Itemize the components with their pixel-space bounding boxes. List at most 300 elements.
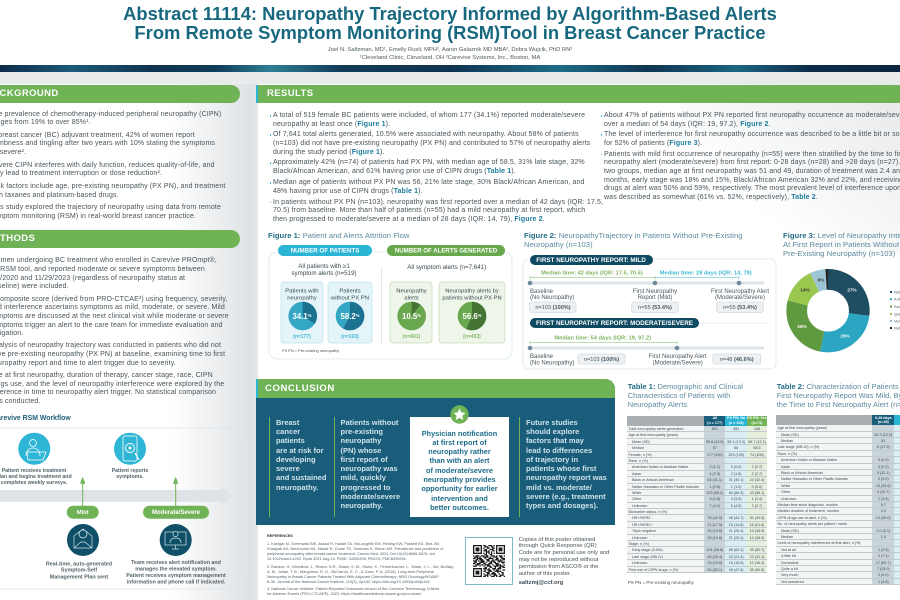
authors and affiliations — [328, 47, 572, 61]
table 2: Asian — [781, 465, 790, 469]
bullet: prevalence — [0, 110, 221, 126]
figure 1: attrition flow — [268, 245, 512, 360]
panel: conclusion — [256, 379, 615, 525]
text: team receives alert: Patient receives symptom management — [126, 573, 226, 579]
table 2: 14 (50.0) — [876, 516, 891, 520]
bullet: px pn — [273, 159, 585, 177]
column text: without pre-existing: pre-existing — [340, 427, 383, 436]
card: neuropathy alerts: Neuropathy — [396, 289, 427, 295]
bullet: moderate first report: over a median of 54 days (IQR: 19, 97.2), Figure 2. — [604, 121, 771, 128]
donut value labels: 1% — [827, 270, 834, 275]
qr notice: permission from ASCO® or the — [519, 564, 598, 570]
table 2: Median — [781, 439, 793, 443]
table 1 title: Neuropathy Alerts — [628, 400, 687, 409]
count boxes: mild: n=55 (53.4%) — [638, 305, 672, 311]
count boxes: moderate/severe: n=103 (100%) — [584, 357, 619, 363]
bullet: adjuvant treatment — [0, 132, 215, 156]
references list: 3. National Cancer Institute. Patient-Reported Outcomes version of the Common Terminology Criteria — [267, 587, 439, 591]
table 2: (n=28) — [878, 420, 889, 424]
text: patient reports symptoms: symptoms. — [116, 474, 144, 480]
timeline arrow — [0, 486, 231, 506]
bullet: px pn: Black/African American, and 61% having prior use of CIPN drugs (Table 1). — [273, 168, 516, 175]
card: alerts by patients without px pn: % — [478, 313, 482, 318]
table 1: 31 (30.1) — [729, 478, 744, 482]
bullet: total patients: A total of 519 female BC patients were included, of whom 177 (34.1%) reported moderate/severe — [273, 112, 585, 119]
background: right top shading — [680, 84, 900, 254]
table 1: Early stage (0-IIIA) — [632, 548, 663, 552]
arrow: mild up — [80, 477, 85, 506]
table 1: 4 (3.9) — [731, 497, 741, 501]
column text: without pre-existing: neuropathy — [340, 436, 381, 445]
frame — [269, 252, 512, 359]
figure 3 title: Pre-Existing Neuropathy (n=103) — [783, 248, 895, 258]
donut value labels: 26% — [840, 334, 850, 339]
heading: background — [0, 85, 240, 103]
table 1: HR+/HER2- — [632, 516, 652, 520]
table 2: Not answered — [781, 580, 804, 584]
callout: physician notification: intervention and — [431, 494, 488, 503]
table 1: 94 (53.1) — [707, 568, 722, 572]
qr code — [465, 537, 513, 585]
authors and affiliations: Joel N. Saltzman, MD¹, Emelly Rusli, MPH², Aaron Galaznik MD MBA², Debra Wujcik, PhD RN² — [328, 47, 572, 53]
callout: physician notification: opportunity for earlier — [421, 484, 498, 493]
frame — [523, 259, 776, 369]
figure 3 title: At First Report in Patients Without — [783, 240, 899, 248]
pill: mild report: FIRST NEUROPATHY REPORT: MILD — [536, 257, 646, 264]
donut value labels: 14% — [800, 288, 810, 293]
column text: without pre-existing: neuropathy. — [340, 501, 383, 510]
table 2: 9 (32.1) — [877, 471, 890, 475]
column text: without pre-existing: moderate/severe — [340, 492, 400, 501]
references list: 10.1002/cam4.4202. Epub 2021 Aug 14. PMID: 34390205; PMCID: PMC8495291. — [267, 557, 407, 561]
text: team receives alert: Team receives alert notification and — [131, 560, 221, 566]
table 1: 0 (0.0) — [752, 484, 762, 488]
references list: A. M., Julian, T. B., Margolese, R. G., McCarron, E. C., & Ganz, P. A. (2018). Long-term Peripheral — [267, 570, 434, 574]
card: neuropathy alerts: (n=801) — [403, 334, 421, 340]
table 2: Black or African American — [781, 471, 823, 475]
column text: risk: and sustained — [276, 473, 326, 482]
table 1: 30 (40.5) — [750, 516, 764, 520]
card: alerts by patients without px pn: patients without PX PN — [442, 296, 502, 302]
table 1: 45 (25.4) — [707, 555, 722, 559]
bullet: total alerts — [273, 131, 590, 157]
column text: future studies: Future studies — [526, 418, 578, 427]
table 1: 5 (4.9) — [731, 504, 741, 508]
arrow: moderate/severe up — [173, 477, 178, 506]
card: patients with neuropathy — [281, 282, 323, 343]
column text: risk: developing — [276, 455, 316, 464]
column text: without pre-existing: Patients without — [340, 418, 398, 427]
bullet: stratification: was described as somewhat (61% vs. 52%, respectively), Table 2. — [604, 194, 818, 201]
card: patients with neuropathy: Patients with — [285, 289, 319, 295]
table 1: 1 (1.0) — [731, 484, 741, 488]
table 2: Mean (SD) — [781, 529, 799, 533]
table 2: Native Hawaiian or Other Pacific Islander — [781, 477, 848, 481]
text: patient reports symptoms: Patient reports — [112, 468, 148, 474]
donut value labels: 27% — [847, 288, 857, 293]
qr notice — [518, 536, 609, 586]
table 2: White — [781, 484, 790, 488]
table 1: 56 — [734, 446, 738, 450]
card: neuropathy alerts: alerts — [404, 296, 419, 302]
qr notice: Code are for personal use only and — [519, 550, 609, 556]
table 1: 39 (52.7) — [750, 548, 764, 552]
table 2: 3 (10.7) — [877, 490, 890, 494]
median labels: mild: Median time: 42 days (IQR: 17.5, 70.5) — [541, 271, 643, 277]
legend — [890, 289, 900, 330]
table 1: 74 (100) — [750, 453, 764, 457]
table 1 footnote: PX PN = Pre-existing neuropathy — [628, 580, 694, 585]
bullet: first report timing: 70.5) from baseline. More than half of patients (n=55) had a mild neuropathy at first report, which — [273, 207, 585, 214]
table 1: Late stage (IIIB-IV) — [632, 555, 663, 559]
table 1: 104 (58.8) — [706, 548, 723, 552]
column text: risk: patients — [276, 436, 305, 445]
icon: patient with laptop — [18, 433, 50, 465]
column text: future studies: should explore — [526, 427, 579, 436]
table 1: Native Hawaiian or Other Pacific Islander — [632, 484, 699, 488]
column text: future studies: types and dosages). — [526, 501, 598, 510]
bullet: exploration — [0, 372, 224, 405]
card: neuropathy alerts: 10.5 — [402, 312, 417, 321]
text: self management plan: Management Plan sent — [50, 574, 108, 580]
table 1: 14 (18.9) — [750, 529, 764, 533]
bullet: interference level: for 52% of patients (Figure 3). — [604, 140, 702, 147]
timeline: moderate/severe — [528, 346, 764, 350]
bullet: total alerts: during the study period (Figure 1). — [273, 149, 385, 156]
table 2: Somewhat — [781, 560, 798, 564]
table 2: Age at first neuropathy (years) — [778, 426, 827, 430]
table 1: American Indian or Alaskan Native — [632, 465, 688, 469]
table 1: 45 (60.8) — [750, 568, 764, 572]
column text: risk: Breast — [276, 418, 299, 427]
references list: Shadyab AH, Neuhouser ML, Nassir R, Crane TE, Sneeram K, Simon MS. Prevalence and predictors of — [267, 547, 443, 551]
bullet: total alerts: (n=103) did not have pre-existing neuropathy (PX PN) and contributed to 57% of neuropathy alerts — [273, 140, 590, 147]
bullet: stratification: Patients with mild first occurrence of neuropathy (n=55) were then stratified by the time to first — [604, 151, 900, 158]
table 2: 5.7 — [881, 503, 886, 507]
references list: peripheral neuropathy after breast cancer treatment. Cancer Med. 2021 Oct;10(19):6666-6676. doi: — [267, 552, 436, 556]
table 2: Median time since diagnosis, months — [778, 503, 838, 507]
donut value labels — [797, 270, 857, 339]
authors and affiliations: ¹Cleveland Clinic, Cleveland, OH ²Carevive Systems, Inc., Boston, MA — [360, 55, 540, 61]
table 1: Black or African American — [632, 478, 674, 482]
table 2 title — [776, 382, 900, 409]
table 2: 7 (25.0) — [877, 567, 890, 571]
table 1: Total neuropathy alerts generated — [628, 427, 683, 431]
text: team receives alert: manages the elevated symptom. — [135, 566, 217, 572]
table 1: 49 (47.6) — [729, 568, 744, 572]
pill: moderate/severe — [143, 506, 209, 519]
table 1: Biomarker status, n (%) — [628, 510, 667, 514]
column text: risk: cancer — [276, 427, 300, 436]
references heading: REFERENCES — [267, 534, 293, 538]
table 1: 28 (15.8) — [707, 561, 722, 565]
table 1: 22 (21.4) — [729, 555, 744, 559]
background: grey top strip — [0, 72, 900, 84]
bullet: interference level — [604, 131, 900, 149]
table 2: Very much — [781, 573, 798, 577]
table 1: 56.7 (12.1) — [748, 440, 766, 444]
table 2: Late stage (IIIB-IV), n (%) — [778, 445, 819, 449]
table 2: 0-28 days — [875, 416, 892, 420]
card: patients with neuropathy: % — [308, 313, 312, 318]
table 1: (n = 177) — [707, 421, 722, 425]
table 2: Not at all — [781, 548, 796, 552]
background: left column shading — [0, 84, 258, 600]
donut slices — [797, 279, 859, 342]
bullet: composite score — [0, 296, 229, 337]
table 1: 55.1 (13.3) — [727, 440, 745, 444]
table 1: 2 (1.1) — [709, 465, 720, 469]
figure 2: trajectory timeline — [522, 255, 776, 370]
table 2 — [776, 415, 900, 585]
bullet: risk factors — [0, 182, 226, 199]
median range: moderate/severe — [530, 341, 677, 344]
table 1: All — [712, 416, 717, 420]
table 1: 43 (58.1) — [750, 491, 764, 495]
column text: without pre-existing: first report of — [340, 455, 388, 464]
title — [123, 3, 777, 43]
table 1: 58.5 — [753, 446, 761, 450]
table 1: Female, n (%) — [628, 453, 652, 457]
references list: for Adverse Events (PRO-CTCAE®). 2023. https://healthcaredelivery.cancer.gov/pro-ctcae/ — [267, 592, 421, 596]
table 1: 60 (58.3) — [729, 491, 744, 495]
bullet: moderate first report — [604, 112, 900, 129]
milestone labels: mild — [530, 289, 769, 301]
table 1: Triple negative — [632, 529, 656, 533]
bullet: without px pn: 48% having prior use of CIPN drugs (Table 1). — [273, 188, 423, 195]
table 1: Asian — [632, 472, 641, 476]
table 1: Unknown — [632, 561, 647, 565]
table 1: 14 (18.9) — [750, 536, 764, 540]
column text: without pre-existing — [340, 418, 400, 510]
qr notice: may not be reproduced without — [519, 557, 598, 563]
figure 1 title: Figure 1: Patient and Alerts Attrition Flow — [268, 230, 409, 240]
text: all patients: All patients with ≥1 — [298, 263, 350, 270]
table 1: 1 (0.6) — [709, 484, 720, 488]
icon: star badge — [450, 405, 469, 424]
milestone labels: mild: First Neuropathy Alert — [711, 289, 769, 295]
callout: physician notification: neuropathy provides — [423, 475, 496, 484]
table 1: 21 (20.4) — [729, 536, 744, 540]
median ranges: mild — [530, 276, 739, 280]
milestone labels: mild: First Neuropathy — [633, 289, 677, 295]
table 2: 2 (7.1) — [878, 554, 889, 558]
table 2: CIPN drugs use at alert, n (%) — [778, 516, 827, 520]
text: team receives alert: information and phone call if indicated. — [127, 580, 226, 586]
card: patients without px pn — [328, 282, 372, 343]
column text: future studies: factors that may — [526, 436, 584, 445]
table 2: 1 (3.6) — [878, 580, 889, 584]
card: alerts by patients without px pn: (n=453) — [463, 334, 481, 340]
median label: moderate/severe: Median time: 54 days (IQR: 19, 97.2) — [554, 336, 651, 342]
table 1: 31 (17.5) — [707, 523, 722, 527]
table 2: 5 (17.9) — [877, 445, 890, 449]
bullet: trajectory analysis — [0, 342, 225, 367]
column text: risk — [276, 418, 326, 492]
bullet: total patients: neuropathy at least once (Figure 1). — [273, 121, 390, 128]
heading: results: RESULTS — [267, 88, 313, 99]
references list: B-30. Journal of the National Cancer Institute, 110(2), djx162. https://doi.org/10.1093/jnci/djx162 — [267, 580, 430, 584]
table 1: 2 (2.7) — [752, 465, 762, 469]
bullet: without px pn — [273, 179, 585, 197]
table 2: Mean (SD) — [781, 433, 799, 437]
table 2: 15 (53.6) — [876, 484, 891, 488]
table 2: Median duration of treatment, months — [778, 509, 839, 513]
column: risk — [269, 417, 330, 517]
pill: number of alerts: NUMBER OF ALERTS GENERATED — [395, 248, 498, 255]
column text: risk: are at risk for — [276, 446, 324, 455]
table 1: 35 (19.8) — [707, 536, 722, 540]
references list: Neuropathy in Breast Cancer Patients Treated With Adjuvant Chemotherapy: NRG Oncology/NSABP — [267, 575, 439, 579]
column text: future studies: patients whose first — [526, 464, 596, 473]
milestone labels: mild: Baseline — [530, 289, 554, 295]
table 1: 177 (100) — [707, 453, 723, 457]
bullet: first report timing — [273, 199, 603, 225]
footnote: PX PN = Pre-existing neuropathy — [282, 348, 339, 353]
table 1: 4 (2.3) — [709, 472, 720, 476]
table 1 title: Table 1: Demographic and Clinical — [628, 382, 743, 391]
references — [267, 534, 454, 596]
bullet: total patients — [273, 112, 585, 129]
text: all alerts: All symptom alerts (n=7,641) — [407, 264, 486, 271]
table 2: Unknown — [781, 497, 796, 501]
column text: future studies: of trajectory in — [526, 455, 578, 464]
card: alerts by patients without px pn: 56.6 — [463, 312, 478, 321]
column: without pre-existing — [334, 417, 405, 517]
column text: without pre-existing: (PN) whose — [340, 446, 381, 455]
text block: methods bullets — [0, 256, 229, 405]
table 1: PX PN: Yes — [747, 416, 767, 420]
table 1: White — [632, 491, 641, 495]
bullet: total alerts: Of 7,641 total alerts generated, 10.5% were associated with neuropathy. About 58% of patients — [273, 131, 579, 138]
table 1: 23 (31.1) — [750, 555, 764, 559]
column text: future studies: mild vs. moderate/ — [526, 483, 592, 492]
callout: physician notification: Physician notification — [422, 428, 497, 438]
column text: without pre-existing: mild, quickly — [340, 473, 386, 482]
pill: number of patients — [278, 245, 372, 256]
count boxes: mild: n=103 (100%) — [535, 305, 571, 311]
figure 2 title: Figure 2: NeuropathyTrajectory in Patients Without Pre-Existing — [524, 230, 743, 240]
bullet: first report timing: In patients without PX PN (n=103), neuropathy was first reported over a median of 42 days (IQR: 17.5, — [273, 199, 603, 206]
table 1: 16 (21.6) — [750, 523, 764, 527]
bullet: population — [0, 256, 217, 290]
table 1: 0 (0.0) — [731, 465, 741, 469]
table 2: No. of neuropathy alerts per patient / week — [778, 522, 847, 526]
milestone labels: mild: (Moderate/Severe) — [715, 295, 765, 301]
table 1: 103 (100) — [728, 453, 744, 457]
pill: moderate/severe report — [530, 318, 768, 328]
timeline: mild — [528, 281, 764, 285]
table 1 title: Characteristics of Patients with — [628, 391, 730, 400]
card: patients with neuropathy: 34.1 — [293, 312, 308, 321]
card: patients without px pn: (n=103) — [341, 334, 359, 340]
bullet: px pn: Approximately 42% (n=74) of patients had PX PN, with median age of 58.5, 31% late stage, 32% — [273, 159, 585, 166]
pill: mild: Mild — [77, 510, 89, 516]
card: patients without px pn: % — [356, 313, 360, 318]
table 1: 55 (31.1) — [707, 478, 722, 482]
table 1 — [627, 416, 767, 573]
callout: physician notification: of moderate/severe — [426, 466, 493, 475]
table 2: 0 (0.0) — [878, 465, 889, 469]
table 1: Mean (SD) — [632, 440, 650, 444]
bullet: interference — [0, 162, 215, 177]
table 1: Prior use of CIPN drugs, n (%) — [628, 568, 678, 572]
table 2: 1 (3.6) — [878, 497, 889, 501]
header band — [0, 65, 900, 72]
card: patients with neuropathy: (n=177) — [293, 334, 311, 340]
qr notice: Copies of this poster obtained — [519, 536, 595, 542]
table 2: 1.0 (0.1) — [876, 529, 890, 533]
heading: results — [256, 85, 900, 103]
milestone labels: moderate/severe: Baseline — [530, 354, 554, 360]
heading: conclusion — [256, 379, 615, 398]
table 2: Other — [781, 490, 790, 494]
column text: without pre-existing: progressed to — [340, 483, 391, 492]
pill: moderate/severe report: FIRST NEUROPATHY REPORT: MODERATE/SEVERE — [536, 320, 693, 327]
table 1: Unknown — [632, 536, 647, 540]
bullet: without px pn: Median age of patients without PX PN was 56, 21% late stage, 30% Black/African American, and — [273, 179, 585, 186]
card: alerts by patients without px pn: Neuropathy alerts by — [445, 289, 499, 295]
divider — [381, 268, 383, 344]
table 2: 2.4 — [881, 509, 886, 513]
callout: physician notification: at first report of — [432, 438, 487, 447]
table 1: 348 — [754, 427, 760, 431]
table 2: 1 (3.6) — [878, 548, 889, 552]
heading: conclusion: CONCLUSION — [265, 383, 335, 394]
median labels: mild: Median time: 28 days (IQR: 14, 79) — [660, 271, 752, 277]
table 1: 65 (63.1) — [729, 548, 744, 552]
table 1: HR+/HER2+ — [632, 523, 652, 527]
figure 2 title: Neuropathy (n=103) — [524, 240, 593, 248]
count boxes: moderate/severe — [578, 354, 760, 364]
column text: risk: neuropathy. — [276, 483, 318, 492]
icon: envelope with plan — [67, 524, 99, 556]
table 1: 801 — [712, 427, 718, 431]
table 2: 52.3 (12.5) — [874, 433, 892, 437]
card: neuropathy alerts: % — [417, 313, 421, 318]
table 2: 1.0 — [881, 535, 886, 539]
table 2: 0 (0.0) — [878, 458, 889, 462]
pill: number of patients: NUMBER OF PATIENTS — [291, 248, 359, 255]
card: alerts by patients without px pn — [439, 282, 505, 343]
table 1: Race, n (%) — [628, 459, 648, 463]
table 1: 2 (1.9) — [731, 472, 741, 476]
text block: background bullets — [0, 110, 226, 220]
count boxes: mild — [530, 302, 763, 312]
bullet: stratification — [604, 151, 900, 203]
count boxes: mild: n=55 (53.4%) — [723, 305, 757, 311]
text: self management plan: Symptom-Self — [61, 568, 97, 574]
figure 2 title — [524, 230, 743, 248]
text: self management plan: Real-time, auto-generated — [46, 561, 112, 567]
icon: team monitor — [160, 524, 192, 556]
column: future studies — [519, 417, 610, 517]
table 1: 46 (44.7) — [729, 516, 744, 520]
table 2: 51 — [881, 439, 885, 443]
card: neuropathy alerts — [390, 282, 432, 343]
heading: methods — [0, 230, 240, 248]
qr notice: saltzmj@ccf.org — [519, 580, 563, 586]
table 1: 7 (4.0) — [709, 504, 720, 508]
qr notice: author of this poster. — [519, 571, 571, 577]
references list: 2. Bandos, H., Melnikow, J., Rivera, D.R., Swain, S. M., Sturtz, K., Fehrenbacher, L., Wade, J. L., 3rd, Brufsky, — [267, 565, 454, 569]
column text: future studies: lead to differences — [526, 446, 592, 455]
pill: moderate/severe: Moderate/Severe — [152, 510, 201, 516]
column text: risk: severe — [276, 464, 300, 473]
table 1: 24 (32.4) — [750, 478, 764, 482]
table 1: 35 (19.8) — [707, 529, 722, 533]
pill: number of alerts — [387, 245, 505, 256]
